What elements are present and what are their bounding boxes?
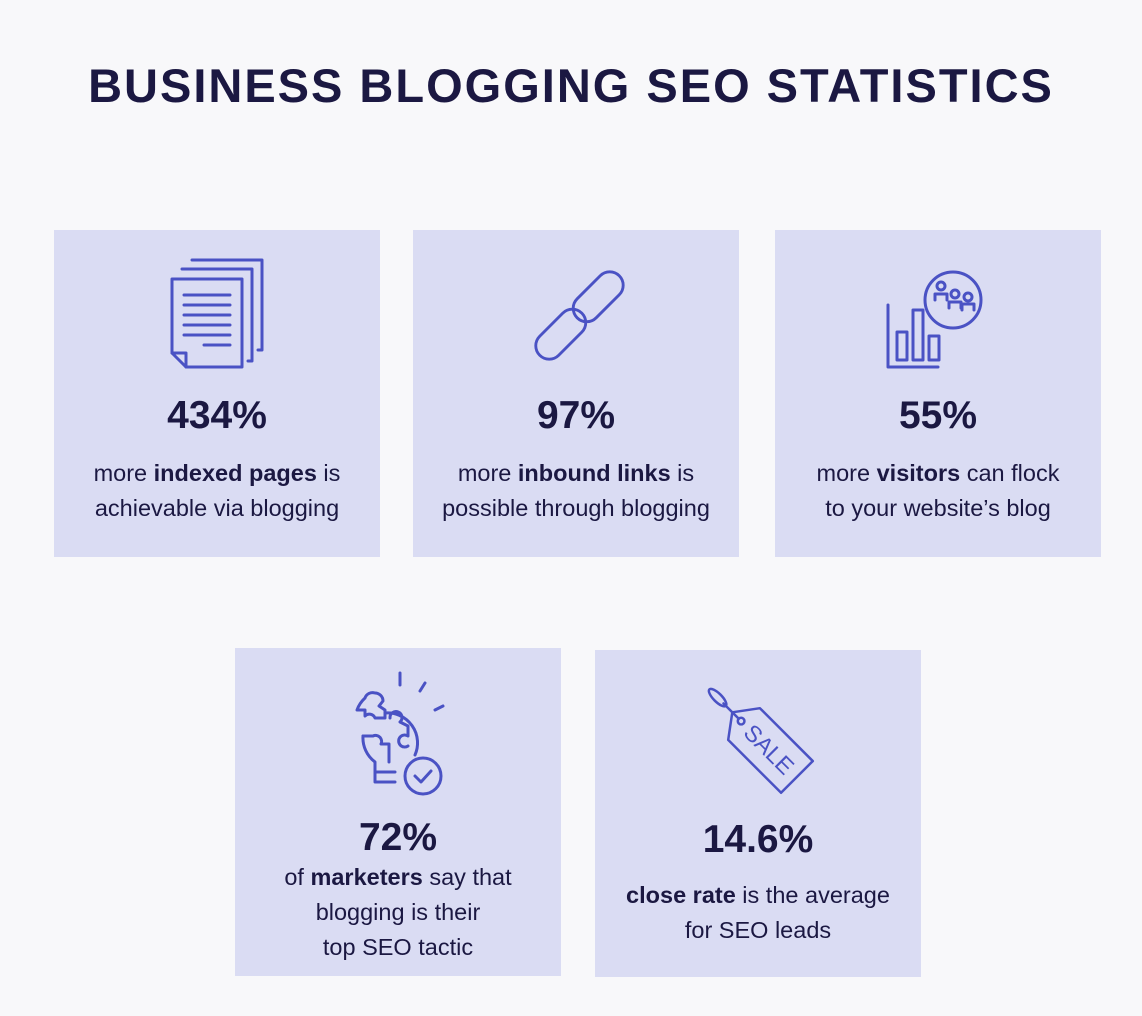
text xyxy=(442,460,710,521)
number: 72% xyxy=(359,816,437,859)
icon: chain link xyxy=(534,270,625,361)
icon: sale tag xyxy=(708,688,814,794)
text: of marketers say that xyxy=(284,864,512,890)
text: close rate is the average xyxy=(626,882,890,908)
panel: close rate xyxy=(595,650,921,977)
text xyxy=(284,864,512,960)
text: achievable via blogging xyxy=(95,495,339,521)
text xyxy=(94,460,340,521)
number: 14.6% xyxy=(703,818,813,861)
icon: puzzle bulb xyxy=(356,672,444,796)
icon: sale tag: SALE xyxy=(739,719,799,780)
panel: marketers xyxy=(235,648,561,976)
number: 97% xyxy=(537,394,615,437)
number: 434% xyxy=(167,394,267,437)
text: blogging is their xyxy=(316,899,480,925)
text: to your website’s blog xyxy=(825,495,1051,521)
number: 55% xyxy=(899,394,977,437)
text: possible through blogging xyxy=(442,495,710,521)
icon: audience chart xyxy=(886,270,982,368)
panel: visitors xyxy=(775,230,1101,557)
text xyxy=(817,460,1060,521)
text: more inbound links is xyxy=(458,460,694,486)
text: top SEO tactic xyxy=(323,934,473,960)
text: for SEO leads xyxy=(685,917,831,943)
title: BUSINESS BLOGGING SEO STATISTICS xyxy=(88,59,1054,112)
text xyxy=(626,882,890,943)
text: more indexed pages is xyxy=(94,460,340,486)
panel: inbound links xyxy=(413,230,739,557)
text: more visitors can flock xyxy=(817,460,1059,486)
icon: documents xyxy=(170,258,264,368)
panel: indexed pages xyxy=(54,230,380,557)
